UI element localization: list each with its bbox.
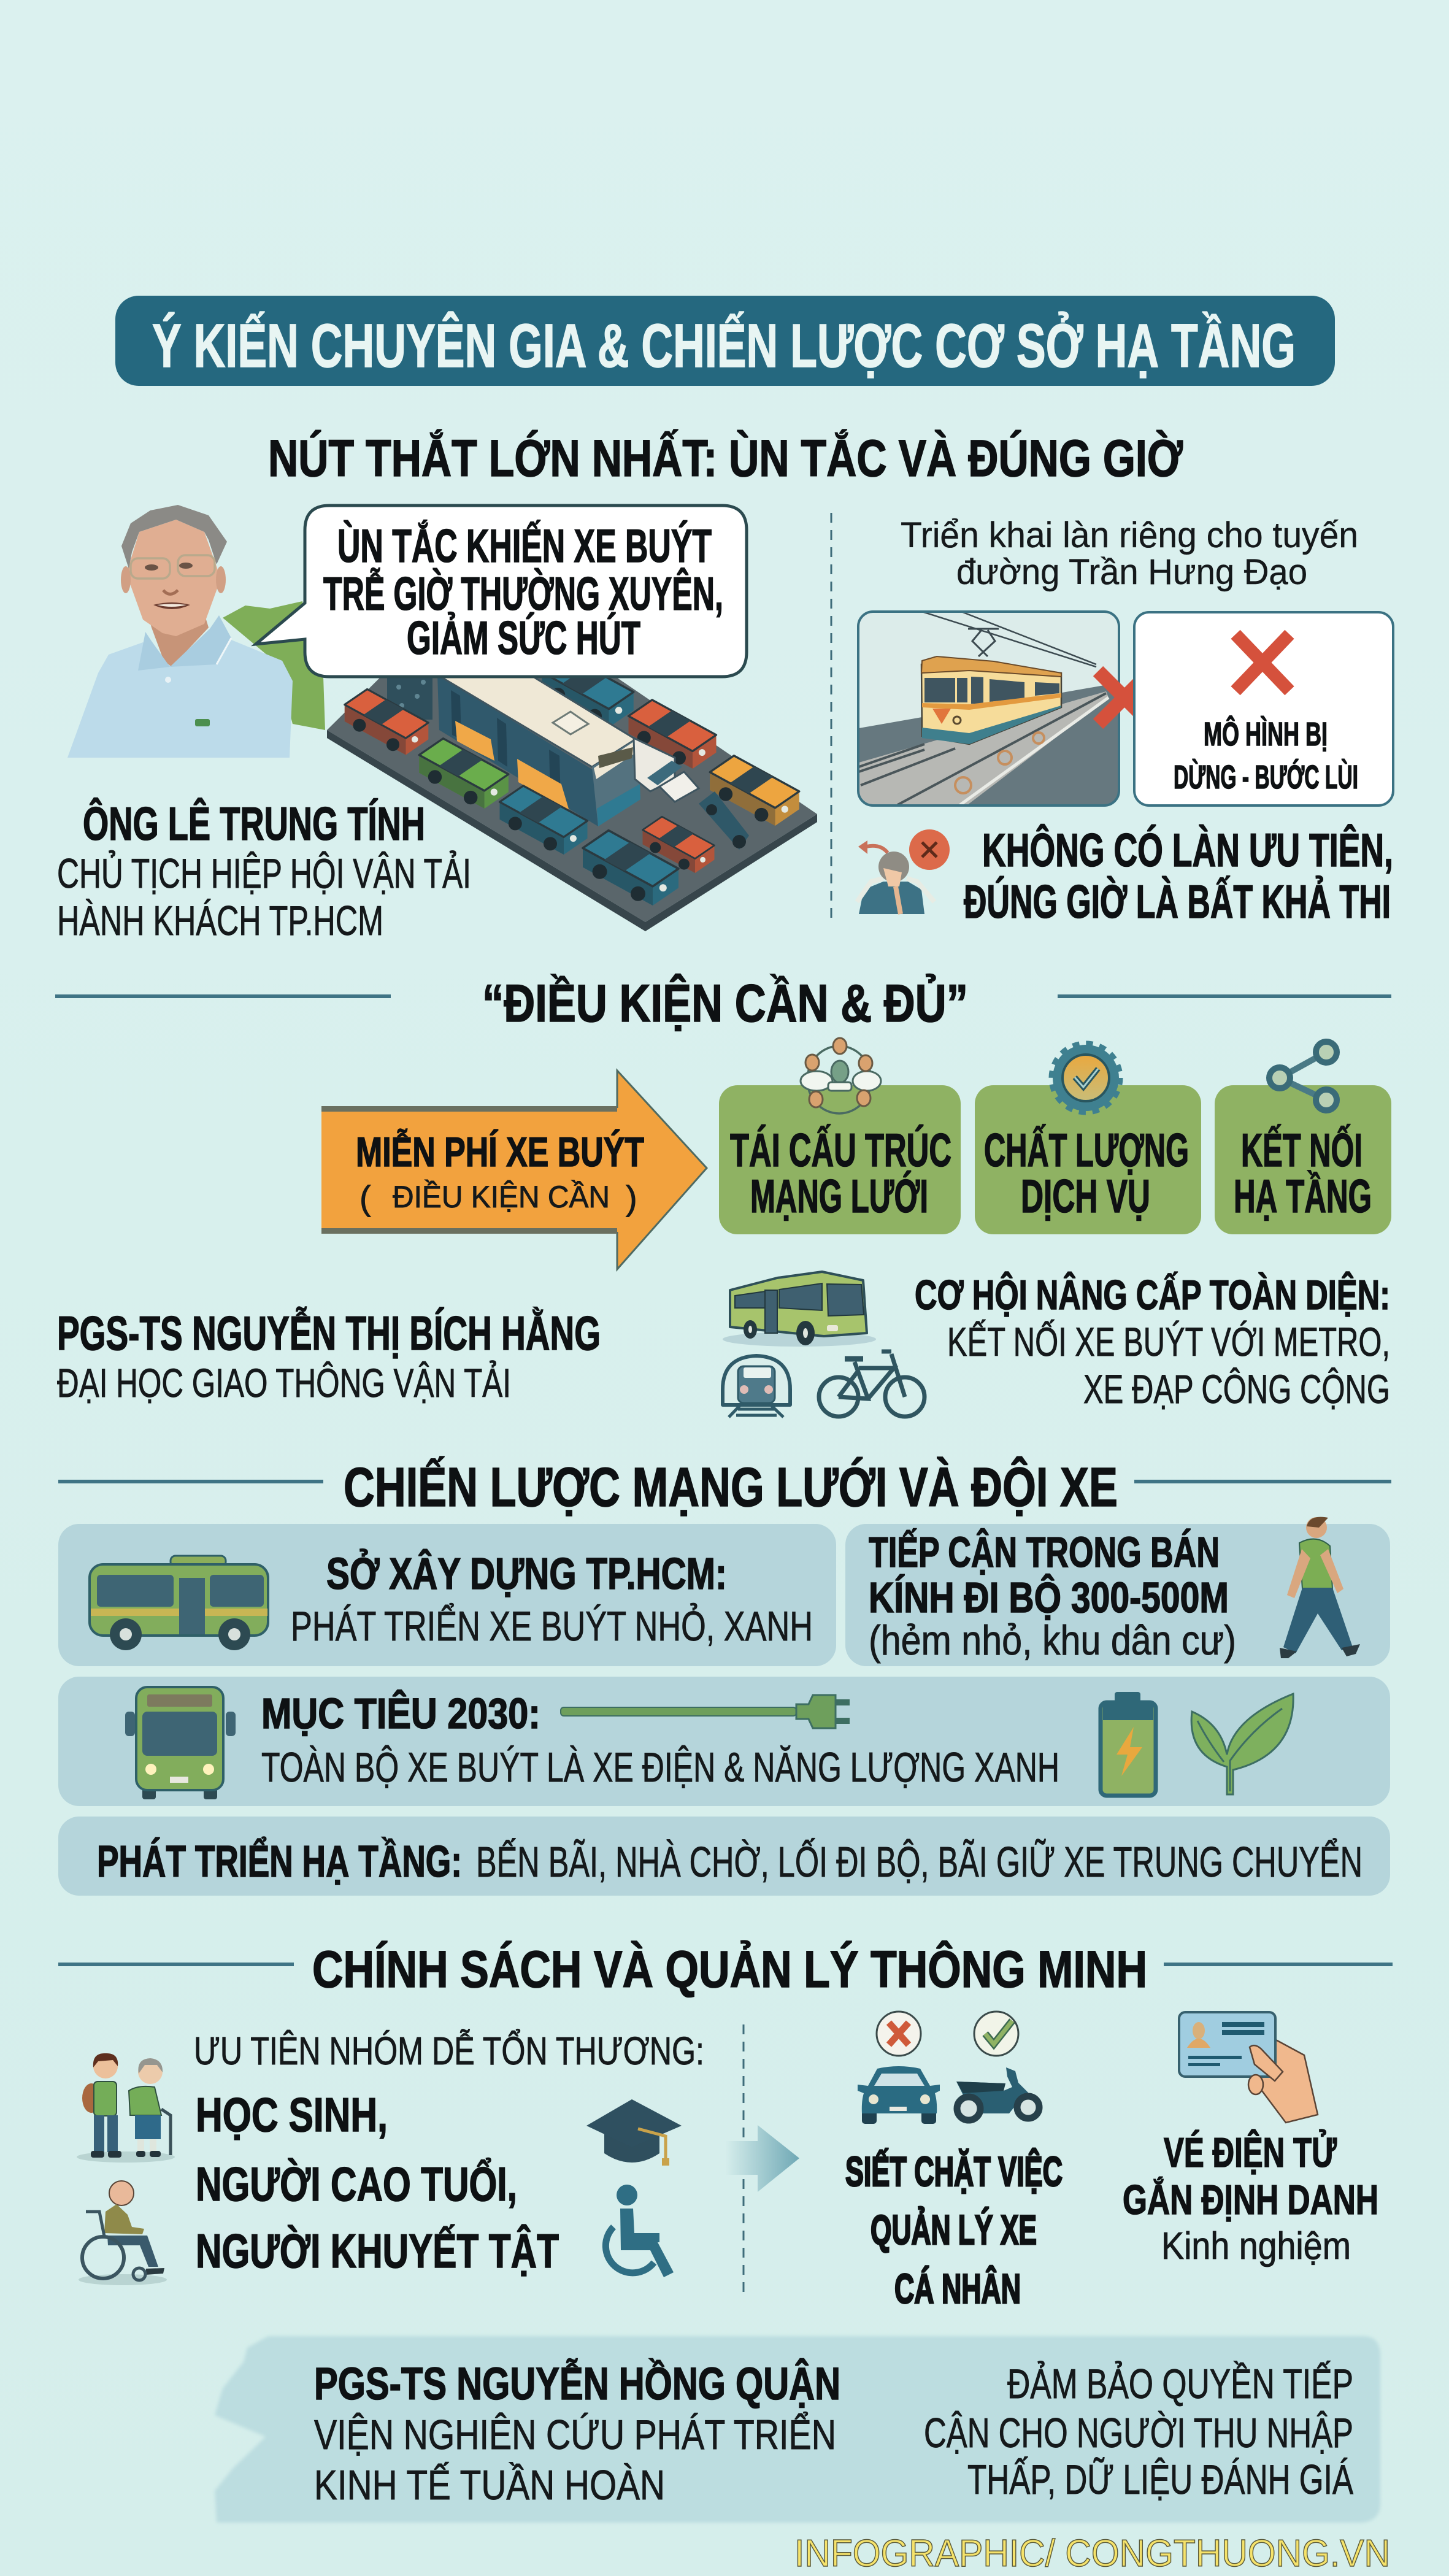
heading: network and fleet strategy: CHIẾN LƯỢC MẠNG LƯỚI VÀ ĐỘI XE — [344, 1456, 1118, 1518]
icon: person in wheelchair — [79, 2181, 167, 2285]
caption: Nguyễn Thị Bích Hằng: PGS-TS NGUYỄN THỊ BÍCH HẰNG — [57, 1306, 601, 1360]
icon: frustrated commuter — [857, 829, 950, 914]
credit: INFOGRAPHIC/ CONGTHUONG.VN — [794, 2532, 1390, 2575]
icon: student and elder — [77, 2053, 175, 2163]
text: Trần Hưng Đạo lane: đường Trần Hưng Đạo — [956, 552, 1307, 592]
text: no priority lane — [964, 824, 1393, 928]
panel: restructure network: MẠNG LƯỚI — [750, 1171, 928, 1223]
panel: service quality: DỊCH VỤ — [1021, 1171, 1150, 1223]
icon: motorbike — [956, 2067, 1039, 2120]
icon: ID card in hand — [1179, 2012, 1318, 2123]
portrait: Lê Trung Tính — [67, 505, 293, 758]
icon: check in circle — [974, 2012, 1018, 2056]
panel: dedicated lane — [857, 515, 1393, 928]
caption: expert name: ÔNG LÊ TRUNG TÍNH — [83, 798, 425, 850]
icon: graduation cap — [586, 2099, 682, 2166]
arrow: to private vehicle management — [725, 2125, 799, 2192]
panel: private vehicle management: QUẢN LÝ XE — [871, 2206, 1037, 2253]
panel: 2030 goal: TOÀN BỘ XE BUÝT LÀ XE ĐIỆN & NĂNG LƯỢNG XANH — [261, 1744, 1059, 1791]
text: upgrade opportunity — [915, 1271, 1390, 1412]
icon: electric plug — [561, 1695, 850, 1728]
caption: expert name: CHỦ TỊCH HIỆP HỘI VẬN TẢI — [57, 850, 471, 897]
arrow: free bus necessary condition — [321, 1071, 707, 1269]
panel: walking radius: (hẻm nhỏ, khu dân cư) — [869, 1617, 1236, 1664]
icon: quality badge — [1052, 1044, 1120, 1112]
panel: electronic ID ticket: VÉ ĐIỆN TỬ — [1164, 2129, 1337, 2176]
panel: small green buses: SỞ XÂY DỰNG TP.HCM: — [326, 1549, 727, 1599]
panel: infrastructure connection — [1215, 1042, 1391, 1234]
caption: Nguyễn Thị Bích Hằng: ĐẠI HỌC GIAO THÔNG VẬN TẢI — [57, 1360, 511, 1405]
icon: bicycle — [819, 1351, 924, 1417]
icon: network — [801, 1038, 881, 1113]
icon: articulated bus — [723, 1272, 876, 1347]
arrow: free bus necessary condition: ( — [359, 1178, 371, 1217]
heading: policy and smart management: CHÍNH SÁCH VÀ QUẢN LÝ THÔNG MINH — [312, 1940, 1147, 1998]
panel: walking radius: KÍNH ĐI BỘ 300-500M — [869, 1573, 1229, 1621]
text: Trần Hưng Đạo lane — [901, 515, 1358, 592]
panel: vulnerable groups: HỌC SINH, — [196, 2088, 388, 2142]
green brush behind bubble — [223, 601, 325, 730]
callout: model stopped: MÔ HÌNH BỊ — [1204, 715, 1328, 753]
panel: private vehicle management — [845, 2012, 1063, 2312]
heading: biggest bottleneck: NÚT THẮT LỚN NHẤT: ÙN TẮC VÀ ĐÚNG GIỜ — [268, 429, 1183, 487]
caption: expert name: HÀNH KHÁCH TP.HCM — [57, 898, 383, 944]
icon: metro train — [723, 1356, 790, 1417]
motorbikes — [699, 791, 749, 850]
panel: traffic congestion expert — [57, 505, 817, 944]
speech bubble: TRỄ GIỜ THƯỜNG XUYÊN, — [323, 567, 723, 620]
red cross over tram — [1098, 671, 1151, 724]
panel: walking radius — [845, 1517, 1390, 1666]
panel: infrastructure development — [58, 1817, 1390, 1896]
panel: vulnerable groups: NGƯỜI KHUYẾT TẬT — [196, 2224, 559, 2278]
panel: private vehicle management: SIẾT CHẶT VIỆC — [845, 2148, 1063, 2195]
arrow: free bus necessary condition: MIỄN PHÍ XE BUÝT — [356, 1128, 644, 1175]
panel: walking radius: TIẾP CẬN TRONG BÁN — [869, 1528, 1220, 1576]
icon: battery — [1101, 1692, 1156, 1796]
icon: leaves — [1191, 1694, 1293, 1794]
panel: infrastructure development: PHÁT TRIỂN HẠ TẦNG: — [97, 1837, 462, 1886]
panel: infrastructure connection: HẠ TẦNG — [1234, 1171, 1372, 1223]
caption: expert name — [57, 798, 471, 944]
panel: vulnerable groups — [77, 2028, 704, 2285]
icon: wheelchair symbol — [605, 2185, 674, 2277]
speech bubble: ÙN TẮC KHIẾN XE BUÝT — [337, 520, 712, 572]
icon: bus front — [125, 1687, 236, 1799]
panel: service quality — [975, 1044, 1201, 1234]
panel: restructure network: TÁI CẤU TRÚC — [730, 1125, 951, 1177]
illustration: traffic jam — [327, 655, 817, 931]
bus — [437, 675, 640, 826]
panel: 2030 goal — [58, 1677, 1390, 1806]
panel: Nguyễn Hồng Quận: KINH TẾ TUẦN HOÀN — [314, 2461, 665, 2509]
caption: Nguyễn Thị Bích Hằng — [57, 1306, 601, 1405]
panel: small green buses: PHÁT TRIỂN XE BUÝT NHỎ, XANH — [291, 1602, 813, 1650]
illustration: tram — [858, 612, 1119, 805]
arrow: free bus necessary condition: ) — [626, 1178, 637, 1217]
callout: model stopped — [1134, 612, 1393, 805]
icon: walking person — [1280, 1517, 1360, 1658]
icon: car — [858, 2066, 940, 2124]
title banner — [115, 296, 1335, 386]
panel: Nguyễn Hồng Quận: PGS-TS NGUYỄN HỒNG QUẬN — [314, 2358, 840, 2409]
panel: electronic ID ticket: Kinh nghiệm — [1161, 2225, 1351, 2267]
panel: private vehicle management: CÁ NHÂN — [894, 2265, 1021, 2312]
icon: cross in circle — [877, 2012, 921, 2056]
speech bubble — [256, 506, 747, 677]
panel: infrastructure connection: KẾT NỐI — [1241, 1125, 1363, 1177]
heading: necessary and sufficient conditions: “ĐIỀU KIỆN CẦN & ĐỦ” — [482, 974, 968, 1033]
icon: small bus — [90, 1556, 268, 1650]
panel: vulnerable groups: NGƯỜI CAO TUỔI, — [196, 2157, 517, 2211]
white van — [634, 738, 699, 802]
panel: Nguyễn Hồng Quận — [215, 2336, 1380, 2523]
panel: restructure network — [719, 1038, 961, 1234]
panel: vulnerable groups: ƯU TIÊN NHÓM DỄ TỔN THƯƠNG: — [194, 2028, 704, 2073]
panel: Nguyễn Hồng Quận: VIỆN NGHIÊN CỨU PHÁT TRIỂN — [314, 2411, 836, 2458]
panel: electronic ID ticket — [1123, 2012, 1378, 2267]
panel: service quality: CHẤT LƯỢNG — [984, 1125, 1189, 1177]
panel: 2030 goal: MỤC TIÊU 2030: — [261, 1689, 540, 1737]
speech bubble: GIẢM SỨC HÚT — [407, 612, 640, 664]
text: Trần Hưng Đạo lane: Triển khai làn riêng cho tuyến — [901, 515, 1358, 555]
panel: small green buses — [58, 1524, 836, 1666]
icon: share nodes — [1269, 1042, 1337, 1110]
arrow: free bus necessary condition: ĐIỀU KIỆN CẦN — [393, 1180, 610, 1214]
